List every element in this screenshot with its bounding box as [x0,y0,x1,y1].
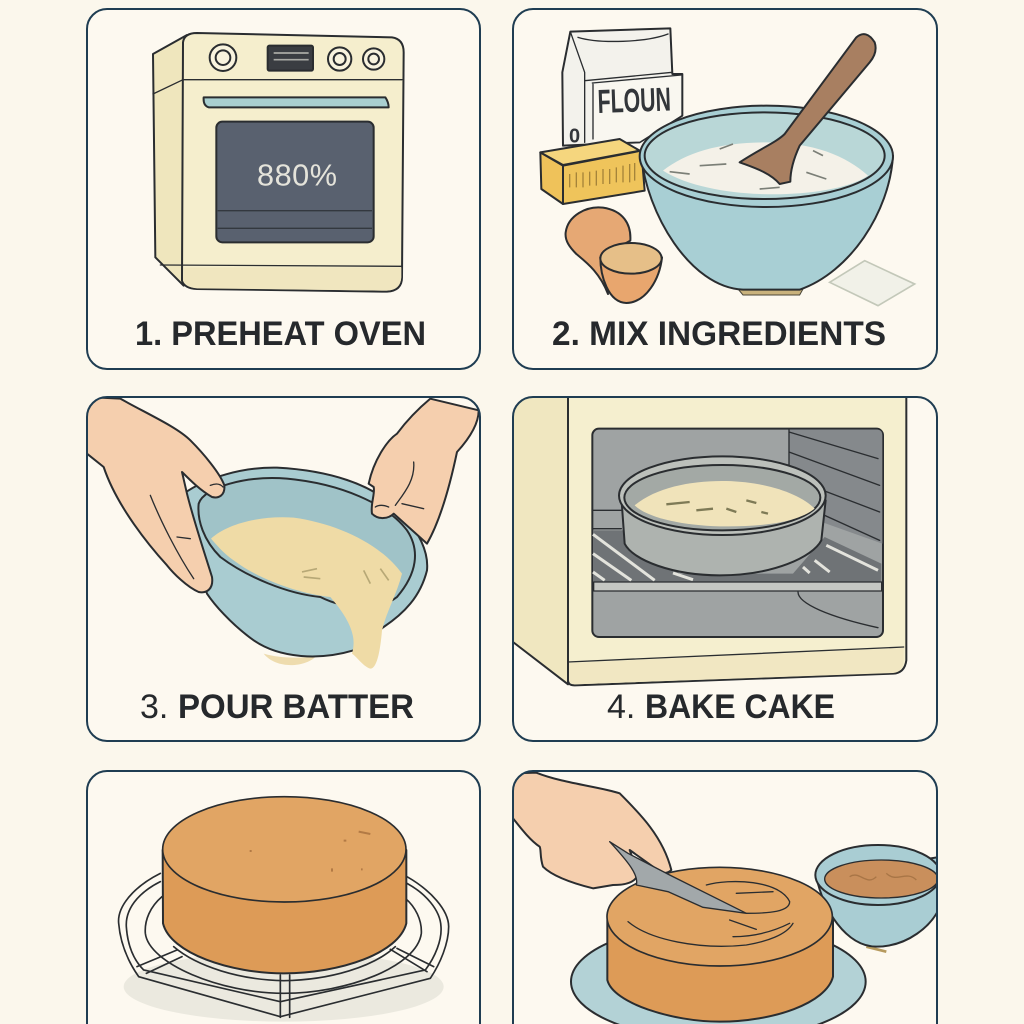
icon: cake [607,867,833,1022]
panel: pour batter [87,397,480,741]
icon: flour bag [562,28,682,147]
icon: cake pan [619,456,826,575]
panel: bake cake [511,395,937,741]
panel: mix ingredients [513,9,937,369]
label: POUR BATTER [178,688,414,726]
rack shadow [124,952,444,1022]
icon: right hand [369,399,479,544]
icon: half egg [600,243,662,303]
icon: bowl [184,468,427,656]
icon: butter [540,139,645,204]
icon: flour bag: 0 [569,125,580,147]
right wall [789,430,882,544]
icon: flour bag: FLOUN [597,81,672,121]
icon: cake on rack [119,797,449,1022]
label number: 3. [140,688,168,726]
knob: left [210,44,236,71]
knob: right [363,48,384,70]
icon: bowl feet [738,289,803,295]
knob: middle [328,47,351,71]
icon: packet [830,261,915,306]
icon: small bowl [815,845,941,952]
icon: hand [513,773,671,888]
icon: mixing bowl [640,34,893,290]
icon: whole egg [566,207,630,294]
icon: left hand [87,397,224,592]
icon: ingredients illustration [540,28,915,306]
batter [211,517,402,669]
drip below bowl [264,654,317,665]
label number: 4. [607,688,635,726]
icon: frosting illustration [513,773,941,1024]
icon: pouring illustration [87,397,479,669]
icon: plate [570,942,867,1024]
icon: oven interior [511,395,906,685]
label: BAKE CAKE [645,688,835,726]
icon: palette knife [610,842,746,913]
icon: cake [163,797,406,973]
panel: frosting [513,771,941,1024]
oven display [268,46,313,71]
oven rack [593,530,882,628]
panel: cooling cake [87,771,480,1024]
label: 2. MIX INGREDIENTS [552,315,886,353]
label: 1. PREHEAT OVEN [135,315,426,353]
icon: oven [153,33,404,292]
oven temperature text: 880% [257,159,337,193]
icon: cooling rack [119,873,449,1017]
panel: preheat oven [87,9,480,369]
